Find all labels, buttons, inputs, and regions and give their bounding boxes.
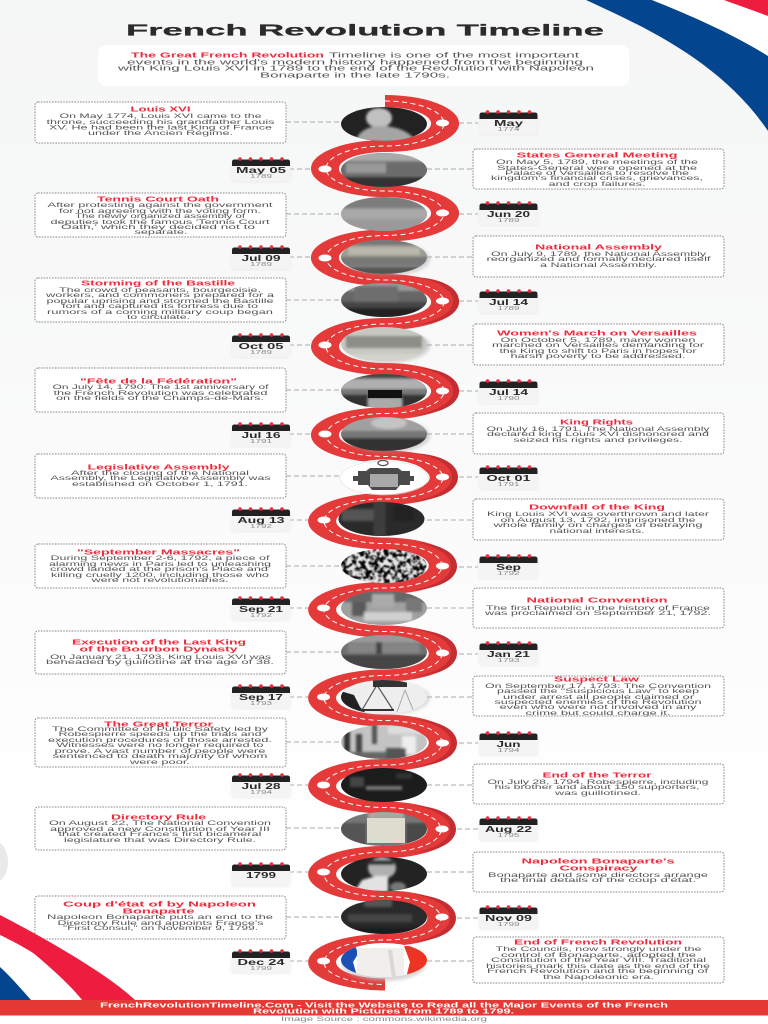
flag ribbon top right	[586, 0, 768, 131]
text: Suspect Law: suspected enemies of the Revolution	[494, 699, 703, 706]
heading: Suspect Law: Suspect Law	[554, 675, 639, 684]
text: National Assembly	[486, 251, 711, 269]
text: End of the Terror: On July 28, 1794, Robespierre, including	[488, 779, 710, 786]
calendar: May 1774	[480, 110, 538, 134]
text: The Great Terror	[48, 726, 273, 766]
text: The Great Terror: prove. A vast number of people were	[54, 748, 267, 755]
text: End of French Revolution: French Revolution and the beginning of	[487, 968, 709, 975]
text: Legislative Assembly: Assembly, the Legislative Assembly was	[50, 475, 270, 482]
text: States General Meeting: Palace of Versailles to resolve the	[505, 170, 690, 177]
text: Louis XVI: XV. He had been the last King of France	[49, 125, 273, 132]
heading: Tennis Court Oath: Tennis Court Oath	[97, 195, 220, 204]
text: End of French Revolution: The Councils, now strongly under the	[496, 946, 703, 953]
text: Women's March on Versailles: On October 5, 1789, many women	[500, 337, 697, 344]
footer banner	[0, 1000, 768, 1016]
image: The Great Terror	[340, 724, 428, 760]
calendar: Jun 20 1789: Jun 20	[487, 210, 531, 219]
calendar: Jul 14 1789: Jul 14	[489, 298, 529, 307]
heading: Execution of the Last King	[72, 638, 247, 654]
image: King Rights scene	[340, 416, 430, 453]
text: States General Meeting	[491, 159, 704, 188]
text: End of the Terror	[488, 779, 710, 797]
calendar: Jul 28 1794: 1794	[250, 790, 272, 796]
text: Napoleon Bonaparte's Conspiracy: the final details of the coup d'état.	[500, 877, 697, 884]
text: End of the Terror: his brother and about 150 supporters,	[494, 784, 700, 791]
heading: Execution of the Last King: of the Bourbon Dynasty	[80, 645, 239, 654]
panel: Storming of the Bastille	[35, 278, 286, 322]
image: Directory Rule constitution	[340, 811, 428, 847]
text: September Massacres: killing cruelly 1200, including those who	[51, 572, 270, 579]
calendar: Aug 22 1795: Aug 22	[485, 825, 533, 834]
calendar: Sep 17 1793	[232, 684, 290, 708]
calendar: May 05 1789: 1789	[250, 174, 272, 180]
image: Fete de la Federation	[340, 373, 428, 409]
text: The Great Terror: were poor.	[128, 759, 191, 766]
text: Suspect Law: crime but could charge it.	[526, 710, 671, 717]
text: Storming of the Bastille: to circulate.	[127, 314, 191, 321]
heading: States General Meeting: States General Meeting	[516, 151, 678, 160]
heading: Legislative Assembly: Legislative Assembly	[88, 463, 231, 472]
text: National Convention: was proclaimed on September 21, 1792.	[483, 610, 712, 617]
flag ribbon bottom left	[0, 915, 135, 1000]
calendar: Dec 24 1799	[232, 949, 290, 974]
calendar: Jul 28 1794	[232, 773, 290, 798]
text: Fete de la Federation	[52, 384, 269, 402]
heading: Coup d'etat: Bonaparte	[122, 907, 194, 916]
heading: Directory Rule: Directory Rule	[111, 813, 206, 822]
panel: Downfall of the King	[473, 499, 724, 540]
text: Legislative Assembly: After the closing of the National	[71, 470, 249, 477]
heading: Fete de la Federation: "Fête de la Fédération"	[80, 377, 238, 386]
calendar: Oct 05 1789	[232, 333, 290, 358]
calendar: 1799: 1799	[246, 871, 277, 880]
text: Fete de la Federation: the French Revolution was celebrated	[54, 390, 269, 397]
text: End of French Revolution: Constitution of the Year VIII. Traditional	[491, 957, 706, 964]
image: Suspect Law scales	[340, 679, 430, 715]
calendar: May 1774: 1774	[498, 127, 520, 133]
calendar: Jun 20 1789: 1789	[498, 218, 520, 224]
text: Downfall of the King: national interests.	[550, 528, 645, 535]
intro panel: events in the world's modern history happened from the beginning	[127, 58, 583, 66]
text: Coup d'etat: Napoleon Bonaparte puts an end to the	[47, 914, 274, 921]
panel: Tennis Court Oath	[35, 193, 286, 237]
calendar: Oct 05 1789: Oct 05	[238, 342, 285, 351]
text: Storming of the Bastille: popular uprising and stormed the Bastille	[46, 298, 275, 305]
footer banner: Revolution with Pictures from 1789 to 1799.	[253, 1009, 514, 1016]
text: Napoleon Bonaparte's Conspiracy: Bonaparte and some directors arrange	[488, 872, 709, 879]
heading: Coup d'etat: Coup d'état of by Napoleon	[63, 900, 257, 909]
calendar: Sep 1792: Sep	[496, 563, 521, 572]
calendar: Jun 20 1789	[480, 201, 538, 226]
intro panel	[98, 45, 629, 86]
text: The Great Terror: Witnesses were no longer required to	[56, 742, 265, 749]
heading: End of the Terror: End of the Terror	[542, 771, 652, 780]
text: End of French Revolution: histories mark this date as the end of the	[486, 963, 711, 970]
text: September Massacres: crowd landed at the prison's Place and	[50, 566, 269, 573]
panel: Directory Rule	[35, 807, 286, 850]
image: Downfall of the King	[338, 501, 426, 537]
calendar: Jul 09 1789	[232, 245, 290, 270]
text: Louis XVI: On May 1774, Louis XVI came to the	[60, 113, 263, 120]
text: Directory Rule: legislature that was Directory Rule.	[64, 837, 257, 844]
heading: Coup d'etat	[63, 900, 257, 916]
text: End of French Revolution	[486, 946, 711, 981]
heading: Women's March on Versailles: Women's March on Versailles	[497, 329, 697, 338]
text: September Massacres: During September 2-6, 1792, a piece of	[50, 555, 270, 562]
heading: Execution of the Last King: Execution of the Last King	[72, 638, 247, 647]
intro panel: Timeline is one of the most important	[329, 51, 579, 59]
text: Directory Rule: On August 22, The National Convention	[49, 820, 272, 827]
text: Downfall of the King	[487, 511, 709, 535]
text: Directory Rule	[49, 820, 272, 844]
calendar: Aug 22 1795	[480, 816, 538, 840]
text: September Massacres: alarming news in Paris led to unleashing	[49, 561, 272, 568]
text: Tennis Court Oath: Oath,' which they decided not to	[61, 224, 256, 231]
text: End of French Revolution: the Napoleonic era.	[543, 974, 655, 981]
calendar: Aug 22 1795: 1795	[498, 833, 520, 839]
text: Tennis Court Oath: for not agreeing with the voting form.	[59, 208, 262, 215]
panel: National Convention	[473, 588, 724, 628]
calendar: Dec 24 1799: Dec 24	[238, 958, 286, 967]
text: Louis XVI: under the Ancien Régime.	[88, 130, 234, 137]
heading: National Convention: National Convention	[526, 596, 668, 605]
panel: Suspect Law	[473, 675, 724, 717]
panel: National Assembly	[473, 236, 724, 277]
calendar: May 1774: May	[494, 119, 524, 128]
text: Suspect Law: passed the "Suspicious Law" to keep	[497, 688, 700, 695]
heading: Napoleon Bonaparte's Conspiracy: Napoleon Bonaparte's	[522, 857, 674, 866]
text: National Assembly: reorganized and formally declared itself	[486, 256, 711, 263]
text: Women's March on Versailles: harsh poverty to be addressed.	[510, 353, 686, 360]
text: Fete de la Federation: on the fields of the Champs-de-Mars.	[56, 395, 265, 402]
text: September Massacres: were not revolutionaries.	[89, 577, 229, 584]
panel: King Rights	[473, 413, 724, 454]
panel: Napoleon Bonaparte's Conspiracy	[473, 852, 724, 892]
text: King Rights	[486, 426, 711, 444]
text: Storming of the Bastille: The crowd of peasants, bourgeoisie,	[59, 287, 262, 294]
calendar: Sep 21 1792: Sep 21	[239, 605, 284, 614]
panel: Fete de la Federation	[35, 368, 286, 412]
text: Coup d'etat: "First Consul," on November 9, 1799.	[63, 925, 259, 932]
text: The Great Terror: execution procedures of those arrested.	[48, 737, 273, 744]
text: Storming of the Bastille: fort and captured its fortress due to	[62, 303, 259, 310]
image source credit: Image Source : commons.wikimedia.org	[281, 1016, 488, 1023]
text: Downfall of the King: on August 13, 1792, imprisoned the	[500, 517, 697, 524]
text: September Massacres	[49, 555, 272, 584]
image: National Assembly	[340, 239, 430, 276]
text: Legislative Assembly: established on October 1, 1791.	[72, 481, 249, 488]
text: Tennis Court Oath	[48, 202, 273, 236]
image: Bastille fortress	[340, 282, 428, 318]
calendar: Jun 1794: 1794	[498, 748, 520, 754]
calendar: 1799	[232, 862, 290, 886]
panel: Louis XVI	[35, 102, 286, 143]
text: End of the Terror: was guillotined.	[553, 790, 642, 797]
text: National Assembly: a National Assembly.	[540, 262, 658, 269]
text: Execution of the Last King: On January 21, 1793, King Louis XVI was	[50, 654, 271, 661]
panel: End of the Terror	[473, 764, 724, 804]
image: Tennis Court Oath	[340, 196, 428, 232]
text: King Rights: On July 16, 1791, The National Assembly	[486, 426, 711, 433]
calendar: Sep 21 1792: 1792	[250, 613, 272, 619]
image: Women's March	[340, 326, 430, 363]
text: Women's March on Versailles: marched on Versailles demanding for	[492, 342, 704, 349]
calendar: May 05 1789: May 05	[236, 166, 287, 175]
calendar: Jul 16 1791: Jul 16	[242, 431, 282, 440]
text: Suspect Law: On September 17, 1793: The Convention	[485, 683, 712, 690]
connector lines	[286, 122, 478, 961]
serpentine road	[317, 101, 459, 984]
calendar: Jul 16 1791: 1791	[250, 439, 272, 445]
text: The Great Terror: The Committee of Public Safety led by	[52, 726, 270, 733]
text: Downfall of the King: whole family on charges of betraying	[491, 522, 704, 529]
panel: Coup d'etat	[35, 896, 286, 939]
text: Louis XVI: throne, succeeding his grandfather Louis	[46, 119, 274, 126]
text: Tennis Court Oath: separate.	[134, 229, 188, 236]
calendar: Sep 21 1792	[232, 596, 290, 620]
image: Coup d'etat	[340, 899, 428, 935]
calendar: Dec 24 1799: 1799	[250, 966, 272, 972]
calendar: Sep 1792	[480, 554, 538, 578]
text: National Assembly: On July 9, 1789, the National Assembly	[491, 251, 708, 258]
text: Napoleon Bonaparte's Conspiracy	[488, 872, 709, 884]
text: Tennis Court Oath: After protesting against the government	[48, 202, 273, 209]
calendar: Jan 21 1793: Jan 21	[487, 650, 531, 659]
footer banner: FrenchRevolutionTimeline.Com - Visit the Website to Read all the Major Events of the French	[100, 1003, 668, 1010]
text: States General Meeting: States-General were opened at the	[497, 165, 698, 172]
text: End of French Revolution: control of Bonaparte, adopted the	[501, 952, 697, 959]
calendar: Aug 13 1792	[232, 507, 290, 532]
calendar: Jul 14 1789: 1789	[498, 306, 520, 312]
text: States General Meeting: On May 5, 1789, the meetings of the	[496, 159, 699, 166]
calendar: Jul 14 1790: 1790	[498, 396, 520, 402]
heading: End of French Revolution: End of French Revolution	[514, 938, 683, 947]
text: Legislative Assembly	[50, 470, 270, 488]
calendar: Aug 13 1792: Aug 13	[238, 516, 286, 525]
calendar: Jun 1794: Jun	[496, 740, 521, 749]
text: Execution of the Last King: beheaded by guillotine at the age of 38.	[46, 659, 275, 666]
calendar: Jul 16 1791	[232, 422, 290, 446]
image: Palace of Versailles	[340, 152, 428, 188]
calendar: Jan 21 1793	[480, 641, 538, 666]
calendar: Oct 01 1791: Oct 01	[486, 474, 532, 483]
panel: Women's March on Versailles	[473, 324, 724, 365]
calendar: Nov 09 1799: 1799	[498, 922, 520, 928]
image: National Convention	[340, 590, 428, 626]
text: Storming of the Bastille	[44, 287, 275, 321]
panel: The Great Terror	[35, 718, 286, 767]
calendar: May 05 1789	[232, 157, 290, 182]
text: King Rights: seized his rights and privileges.	[514, 437, 683, 444]
calendar: Sep 1792: 1792	[498, 571, 520, 577]
image: Louis XVI portrait	[340, 106, 428, 142]
heading: King Rights: King Rights	[560, 418, 633, 427]
calendar: Oct 01 1791: 1791	[498, 482, 520, 488]
heading: September Massacres: "September Massacres"	[77, 548, 241, 557]
text: Women's March on Versailles	[492, 337, 704, 360]
heading: Louis XVI: Louis XVI	[130, 105, 190, 114]
text: King Rights: declared king Louis XVI dishonored and	[487, 431, 710, 438]
text: Louis XVI	[46, 113, 274, 137]
calendar: Jul 14 1790: Jul 14	[489, 388, 529, 397]
image: September Massacres	[340, 548, 428, 584]
intro panel: with King Louis XVI in 1789 to the end of the Revolution with Napoleon	[116, 64, 594, 72]
image: Legislative Assembly medal	[340, 460, 428, 495]
text: States General Meeting: and crop failures.	[548, 181, 646, 188]
calendar: Sep 17 1793: 1793	[250, 701, 272, 707]
calendar: Jul 09 1789: Jul 09	[242, 254, 282, 263]
heading: National Assembly: National Assembly	[535, 243, 664, 252]
heading: Downfall of the King: Downfall of the King	[529, 503, 666, 512]
text: Downfall of the King: King Louis XVI was overthrown and later	[487, 511, 709, 518]
panel: States General Meeting	[473, 149, 724, 189]
calendar: Sep 17 1793: Sep 17	[239, 693, 283, 702]
calendar: Jul 09 1789: 1789	[250, 262, 272, 268]
heading: Napoleon Bonaparte's Conspiracy	[522, 857, 674, 873]
panel: Legislative Assembly	[35, 454, 286, 498]
panel: September Massacres	[35, 544, 286, 588]
text: Tennis Court Oath: deputies took the famous 'Tennis Court	[50, 219, 270, 226]
panel: End of French Revolution	[473, 937, 724, 983]
text: Tennis Court Oath: The newly organized assembly of	[75, 213, 246, 220]
calendar: Jun 1794	[480, 731, 538, 756]
text: Directory Rule: approved a new Constitution of Year III	[50, 826, 271, 833]
text: Suspect Law: even who were not involved in any	[500, 704, 698, 711]
text: Suspect Law	[485, 683, 712, 717]
calendar: Oct 05 1789: 1789	[250, 350, 272, 356]
image: French flag	[340, 942, 428, 981]
image: End of the Terror	[340, 767, 428, 803]
calendar: Jul 14 1789	[480, 289, 538, 314]
title: French Revolution Timeline	[126, 22, 604, 40]
text: National Convention	[483, 605, 712, 617]
text: Fete de la Federation: On July 14, 1790: The 1st anniversary of	[52, 384, 269, 391]
text: Women's March on Versailles: the King to shift to Paris in hopes for	[500, 348, 696, 355]
calendar: Nov 09 1799	[480, 905, 538, 930]
text: National Convention: The first Republic in the history of France	[486, 605, 711, 612]
text: Coup d'etat	[47, 914, 274, 932]
calendar: Jul 28 1794: Jul 28	[242, 782, 282, 791]
calendar: Jul 14 1790	[480, 379, 538, 404]
heading: The Great Terror: The Great Terror	[104, 720, 213, 729]
text: States General Meeting: kingdom's financial crises, grievances,	[491, 175, 704, 182]
text: Storming of the Bastille: workers, and commoners prepared for a	[44, 292, 275, 299]
calendar: Aug 13 1792: 1792	[250, 524, 272, 530]
text: Execution of the Last King	[46, 654, 275, 666]
heading: Napoleon Bonaparte's Conspiracy: Conspiracy	[560, 864, 639, 873]
image: Execution of Louis XVI	[340, 634, 428, 670]
text: The Great Terror: Robespierre speeds up the trials and	[58, 731, 263, 738]
panel: Execution of the Last King	[35, 631, 286, 674]
text: Suspect Law: under arrest all people claimed or	[503, 694, 694, 701]
image: Napoleon portrait	[340, 856, 428, 892]
text: The Great Terror: sentenced to death majority of whom	[52, 753, 268, 760]
text: Storming of the Bastille: rumors of a coming military coup began	[47, 309, 274, 316]
heading: Storming of the Bastille: Storming of the Bastille	[81, 279, 235, 288]
text: Directory Rule: that created France's first bicameral	[58, 831, 262, 838]
intro panel: The Great French Revolution	[131, 51, 324, 59]
intro panel: Bonaparte in the late 1790s.	[260, 71, 450, 79]
calendar: Jan 21 1793: 1793	[498, 658, 520, 664]
calendar: Oct 01 1791	[480, 465, 538, 490]
calendar: Nov 09 1799: Nov 09	[485, 914, 533, 923]
text: Coup d'etat: Directory Rule and appoints France's	[58, 920, 264, 927]
